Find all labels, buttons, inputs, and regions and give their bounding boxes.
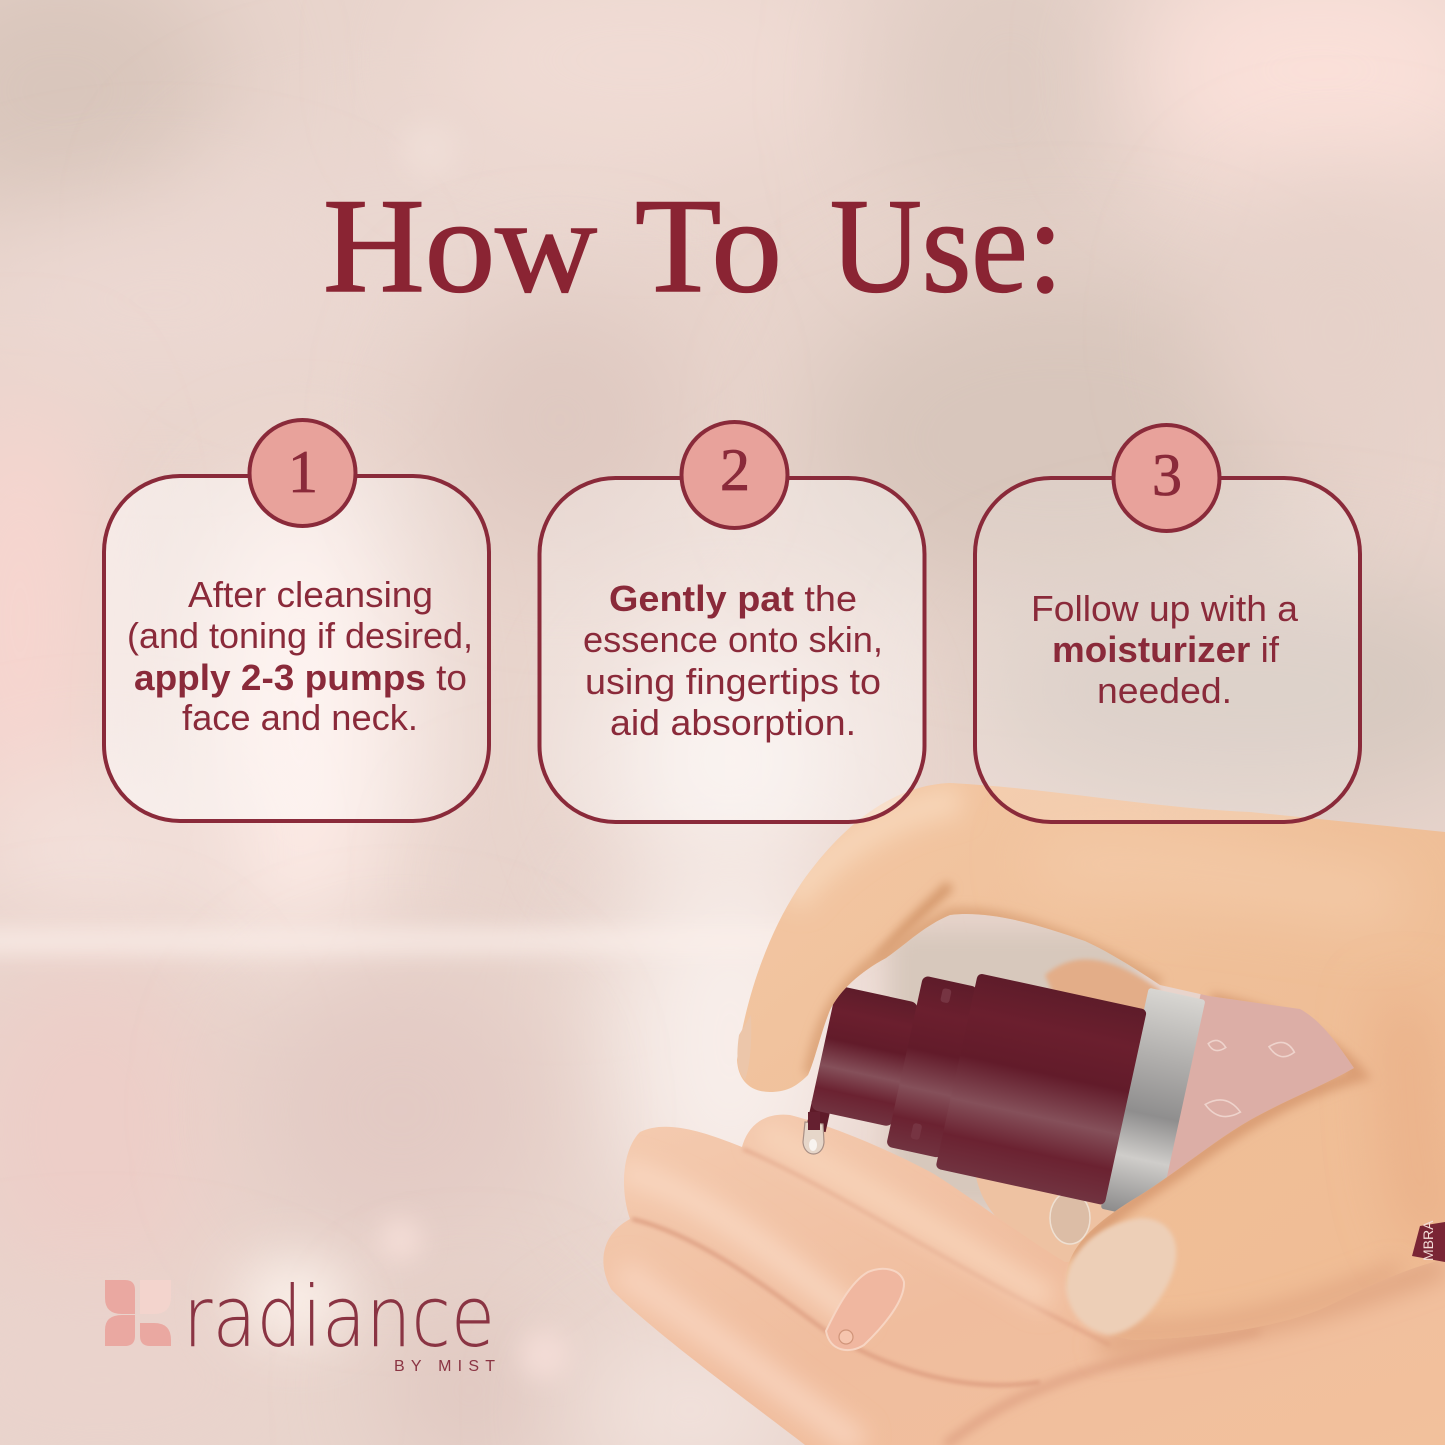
label strip on bottle: [1412, 1220, 1445, 1262]
hand: open palm and fingers: [603, 1115, 1445, 1445]
nozzle: [810, 985, 919, 1127]
step 1 text: [127, 574, 473, 738]
label strip on bottle: MBRA: [1420, 1220, 1436, 1261]
step 2 text: aid absorption.: [610, 702, 856, 743]
fingernail: [737, 1015, 751, 1080]
hand: index finger and thumb: [737, 783, 1445, 1340]
middle collar: [886, 975, 978, 1158]
droplet: [803, 1112, 824, 1154]
serum on finger: [826, 1192, 1090, 1350]
step 2 badge: 2: [720, 437, 750, 503]
step 2 badge: [682, 422, 788, 528]
title: To: [635, 172, 782, 321]
pump bottle: [803, 895, 1440, 1271]
logo mark: [105, 1280, 171, 1346]
step 3 badge: 3: [1152, 442, 1182, 508]
step 1 badge: [250, 420, 356, 526]
main cap: [935, 973, 1147, 1205]
step 2 text: essence onto skin,: [583, 619, 883, 660]
panel: step 3: [975, 425, 1360, 822]
panel: step 1: [104, 420, 489, 821]
collar nubs: [910, 988, 952, 1140]
title: [323, 172, 1063, 321]
step 3 text: [1031, 588, 1299, 711]
wordmark: radiance: [183, 1268, 495, 1366]
step 2 text: [583, 578, 883, 743]
logo: [105, 1268, 495, 1375]
silver collar: [1101, 988, 1205, 1221]
step 1 text: (and toning if desired,: [127, 615, 473, 656]
bottle body with leaf pattern: [1152, 971, 1440, 1267]
hand: back finger behind bottle: [975, 959, 1160, 1265]
step 1 text: After cleansing: [188, 574, 433, 615]
thumbnail: [1066, 1218, 1176, 1335]
panel: step 2: [540, 422, 924, 822]
step 1 text: apply 2-3 pumps to: [134, 657, 467, 698]
step 3 text: Follow up with a: [1031, 588, 1299, 629]
step 2 text: Gently pat the: [609, 578, 857, 619]
spout: [806, 1101, 832, 1132]
step 1 badge: 1: [288, 439, 318, 505]
step 3 text: moisturizer if: [1052, 629, 1280, 670]
step 3 badge: [1114, 425, 1220, 531]
title: Use:: [830, 172, 1063, 321]
step 1 text: face and neck.: [182, 697, 418, 738]
tagline: BY MIST: [394, 1358, 495, 1375]
step 3 text: needed.: [1097, 670, 1232, 711]
step 2 text: using fingertips to: [585, 661, 881, 702]
title: How: [323, 172, 597, 321]
